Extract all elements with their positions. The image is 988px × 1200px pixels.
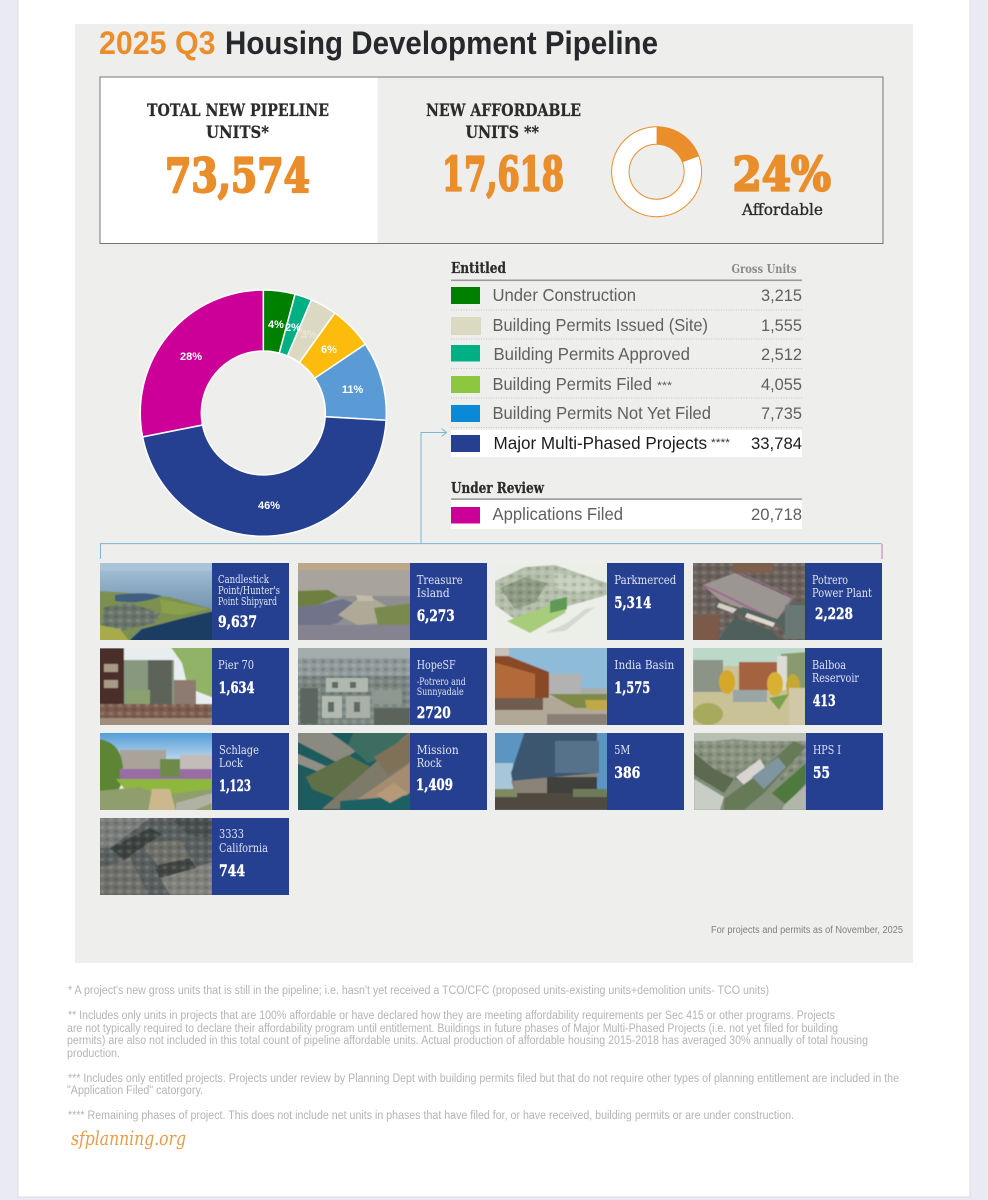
project card: Pier 70: 1,634 — [218, 678, 254, 697]
row: major multi-phased projects: **** — [711, 437, 731, 449]
project card: HopeSF: 2720 — [417, 703, 451, 722]
total pipeline panel: 73,574 — [165, 149, 310, 204]
24 percent affordable: Affordable — [741, 200, 823, 219]
project card: Balboa Reservoir: Reservoir — [812, 671, 859, 685]
project card: 3333 California: 3333 — [219, 827, 244, 841]
legend: entitled: Gross Units — [732, 262, 797, 276]
project card: 5M: 386 — [614, 763, 640, 782]
project card: Candlestick: Point/Hunter's — [218, 584, 280, 597]
row: building permits issued: Building Permits Issued (Site) — [492, 315, 708, 335]
project card: Potrero Power Plant: Power Plant — [812, 586, 872, 600]
project card: 3333 California: California — [219, 841, 268, 855]
project card: Parkmerced — [493, 561, 684, 642]
affordable units — [426, 101, 581, 202]
affordable units: NEW AFFORDABLE — [426, 101, 581, 121]
footnote 2: ** Includes only units in projects that are 100% affordable or have declared how they are meeting affordability requirements per Sec 415 or other programs. Projects — [68, 1010, 835, 1022]
project card: Candlestick: Candlestick — [218, 573, 269, 586]
legend: under review: Applications Filed — [492, 504, 623, 524]
row: building permits filed — [451, 374, 802, 394]
website link text: sfplanning.org — [71, 1126, 186, 1150]
footnote 1: * A project's new gross units that is still in the pipeline; i.e. hasn't yet received a TCO/CFC (proposed units-existing units+demolition units- TCO units) — [68, 985, 769, 997]
donut percentage labels: 28% — [180, 351, 202, 363]
footnote 3: "Application Filed" catorgory. — [67, 1085, 203, 1097]
footnote 2: production. — [67, 1048, 120, 1060]
row: building permits not yet filed — [451, 403, 802, 423]
legend: entitled — [451, 259, 802, 457]
title: Housing Development Pipeline — [225, 25, 658, 61]
project card: Schlage Lock: Schlage — [219, 743, 259, 757]
legend: under review: 20,718 — [751, 505, 802, 524]
project card: Parkmerced: Parkmerced — [614, 573, 677, 587]
row: building permits approved: 2,512 — [761, 345, 802, 364]
row: major multi-phased projects: 33,784 — [751, 434, 802, 453]
footnote 2: are not typically required to declare their affordability program until entitlement. Buildings in future phases of Major Multi-Phased Projects (i.e. not yet filed for building — [67, 1023, 838, 1035]
row: under construction: Under Construction — [492, 285, 636, 305]
affordable units: 17,618 — [442, 148, 564, 202]
project card: 5M — [493, 731, 684, 812]
row: building permits issued — [451, 315, 802, 335]
row: under construction — [451, 285, 802, 305]
donut percentage labels: 2% — [285, 322, 301, 334]
project card: Mission Rock — [296, 731, 487, 812]
row: building permits approved: Building Permits Approved — [494, 344, 690, 364]
legend: entitled: Entitled — [451, 259, 506, 277]
row: under construction: 3,215 — [761, 286, 802, 305]
project card: Potrero Power Plant — [691, 561, 882, 642]
project card: Balboa Reservoir: 413 — [813, 691, 836, 710]
project card: Schlage Lock — [98, 731, 289, 812]
legend: under review: Under Review — [451, 479, 545, 497]
donut percentage labels: 6% — [321, 344, 337, 356]
project card: Treasure Island: Treasure — [417, 573, 463, 587]
row: building permits not yet filed: Building Permits Not Yet Filed — [492, 403, 711, 423]
total pipeline panel — [100, 78, 378, 243]
donut percentage labels: 11% — [342, 384, 364, 396]
project card: Candlestick — [98, 561, 289, 642]
24 percent affordable: 24% — [732, 148, 831, 202]
main grey panel — [75, 24, 913, 963]
footnote 3: *** Includes only entitled projects. Projects under review by Planning Dept with building permits filed but that do not require other types of planning entitlement are included in the — [68, 1073, 899, 1085]
project card: Balboa Reservoir: Balboa — [812, 658, 846, 672]
footnote 4: **** Remaining phases of project. This does not include net units in phases that have filed for, or have received, building permits or are under construction. — [68, 1110, 794, 1122]
donut percentage labels: 46% — [258, 500, 280, 512]
donut percentage labels: 4% — [268, 319, 284, 331]
affordable share donut — [612, 127, 702, 217]
project card: Pier 70 — [98, 646, 289, 727]
project card: Parkmerced: 5,314 — [614, 593, 651, 612]
project card: Mission Rock: Rock — [417, 756, 442, 770]
project card: HopeSF — [296, 646, 487, 727]
project card: India Basin: India Basin — [614, 658, 675, 672]
project card: HPS I: HPS I — [813, 743, 841, 757]
project card: 3333 California — [98, 816, 289, 897]
footnote 3 — [67, 1073, 899, 1097]
project card: HopeSF: HopeSF — [417, 658, 456, 672]
project card: HPS I — [692, 731, 883, 812]
project card: Schlage Lock: Lock — [219, 756, 244, 770]
project card: Candlestick: Point Shipyard — [218, 595, 277, 608]
project card: HPS I: 55 — [813, 763, 830, 782]
footnote 2 — [67, 1010, 868, 1060]
row: building permits filed: *** — [657, 380, 673, 392]
project card: Potrero Power Plant: Potrero — [812, 573, 848, 587]
row: major multi-phased projects: Major Multi-Phased Projects — [494, 433, 707, 453]
project card: Schlage Lock: 1,123 — [219, 776, 251, 795]
total pipeline panel: UNITS* — [206, 123, 269, 143]
project card: Treasure Island: 6,273 — [417, 606, 455, 625]
project card: India Basin — [493, 646, 684, 727]
project card: HopeSF: Sunnyadale — [417, 687, 464, 698]
arrow: connector from major projects to project grid — [100, 428, 882, 559]
project card: 3333 California: 744 — [219, 861, 245, 880]
legend: under review — [451, 479, 802, 529]
project card: Candlestick: 9,637 — [218, 612, 257, 631]
project card: Mission Rock: Mission — [417, 743, 459, 757]
main donut chart — [140, 290, 386, 536]
row: major multi-phased projects — [451, 430, 802, 457]
row: building permits filed: 4,055 — [761, 375, 802, 394]
summary box — [100, 77, 883, 244]
project card: Mission Rock: 1,409 — [416, 775, 453, 794]
row: building permits issued: 1,555 — [761, 316, 802, 335]
project card: Balboa Reservoir — [691, 646, 882, 727]
project card: 5M: 5M — [614, 743, 630, 757]
total pipeline panel: TOTAL NEW PIPELINE — [147, 101, 329, 121]
donut percentage labels: 3% — [301, 329, 317, 341]
as-of date note: For projects and permits as of November, 2025 — [711, 925, 903, 936]
project card: Treasure Island — [296, 561, 487, 642]
row: building permits filed: Building Permits Filed — [492, 374, 652, 394]
affordable units: UNITS ** — [466, 123, 539, 143]
project card: Potrero Power Plant: 2,228 — [815, 604, 853, 623]
row: building permits approved — [451, 344, 802, 364]
title: 2025 Q3 — [99, 25, 216, 61]
project card: HopeSF: -Potrero and — [417, 677, 466, 688]
project card: Pier 70: Pier 70 — [218, 658, 254, 672]
footnote 2: permits) are also not included in this total count of pipeline affordable units. Actual production of affordable housing 2015-2018 has averaged 30% annually of total housing — [67, 1035, 868, 1047]
donut percentage labels — [180, 319, 364, 512]
project card: India Basin: 1,575 — [614, 678, 650, 697]
project card: Treasure Island: Island — [417, 586, 450, 600]
row: building permits not yet filed: 7,735 — [761, 404, 802, 423]
